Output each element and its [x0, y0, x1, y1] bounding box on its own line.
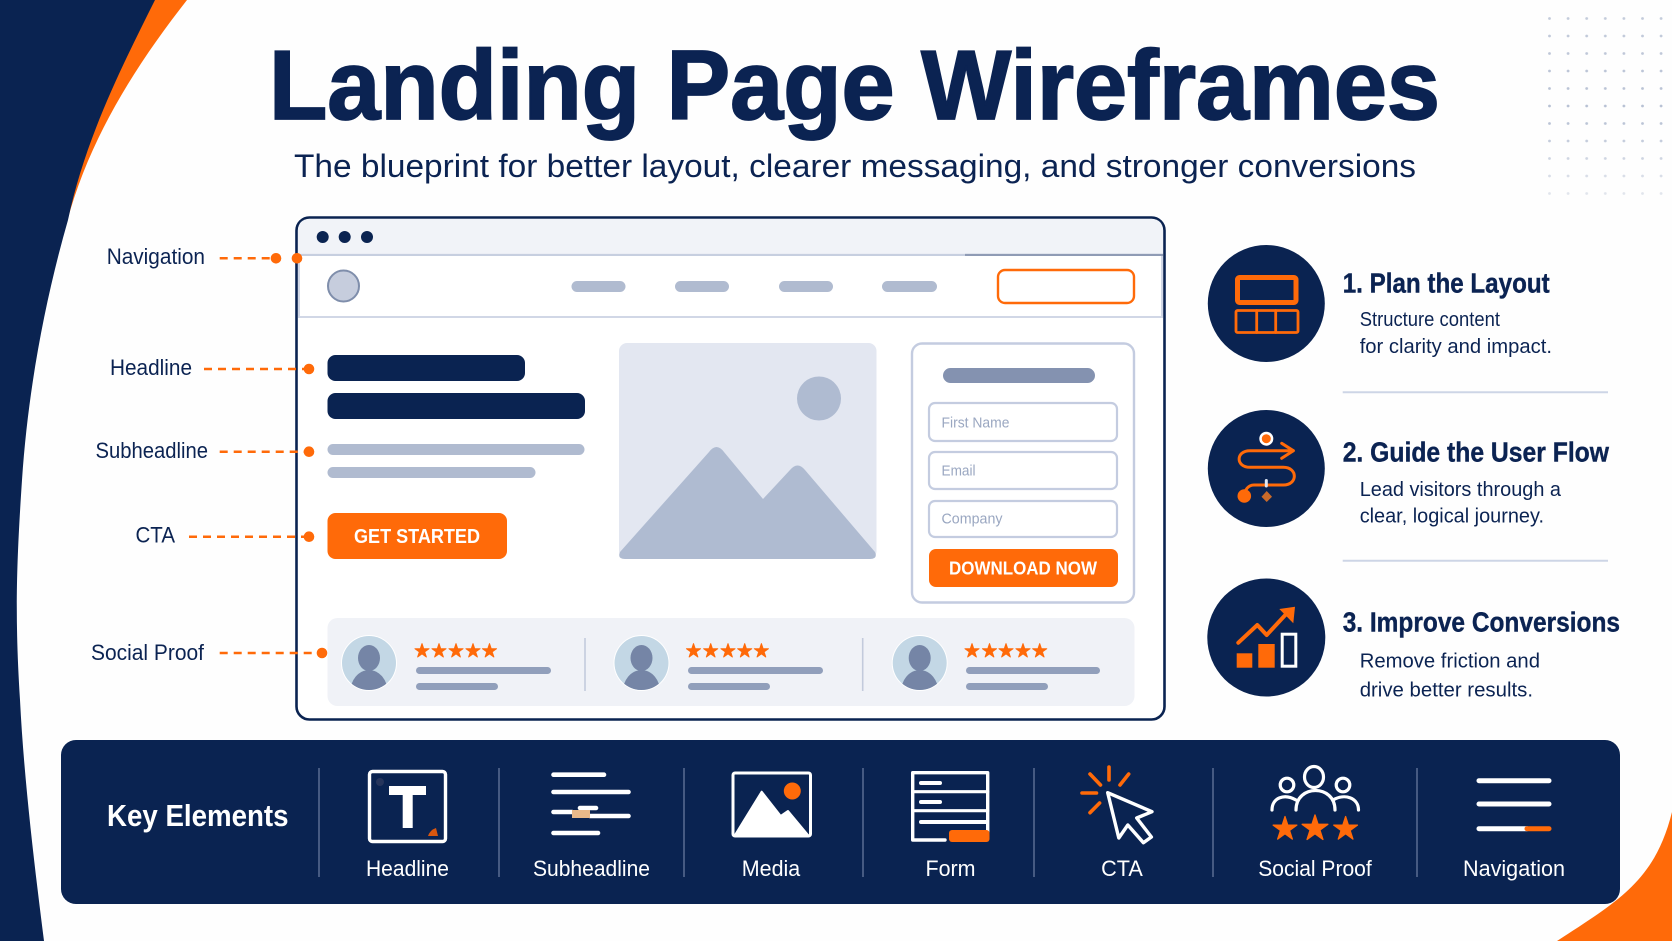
- navigation bar: [299, 256, 1162, 317]
- icon: user flow path: [1208, 410, 1325, 527]
- step 3 text: Remove friction and: [1360, 649, 1540, 672]
- callout: CTA: [136, 523, 314, 548]
- step 3 text: drive better results.: [1360, 679, 1533, 702]
- callout: Headline: Headline: [110, 355, 192, 380]
- item: form: [913, 773, 990, 881]
- step 1 text: for clarity and impact.: [1360, 335, 1552, 358]
- step 3 text: [1343, 607, 1620, 702]
- social proof band: [328, 618, 1134, 706]
- step 2: guide the user flow: [1208, 410, 1609, 527]
- testimonial 3: [892, 635, 1100, 691]
- callout: Subheadline: [96, 438, 314, 463]
- panel: browser wireframe: [296, 218, 1164, 720]
- media placeholder: [619, 343, 876, 559]
- item: headline: [366, 772, 449, 881]
- CTA button: GET STARTED: [354, 526, 480, 548]
- step 1 text: 1. Plan the Layout: [1343, 268, 1550, 299]
- CTA button: [328, 513, 507, 559]
- subtitle: The blueprint for better layout, clearer messaging, and stronger conversions: [294, 148, 1416, 184]
- item: social proof: Social Proof: [1258, 856, 1373, 881]
- item: navigation: Navigation: [1463, 856, 1565, 881]
- callout: Subheadline: Subheadline: [96, 438, 208, 463]
- item: subheadline: Subheadline: [533, 856, 650, 881]
- step 1 text: [1343, 268, 1552, 358]
- browser top bar: [298, 219, 1163, 255]
- item: headline: Headline: [366, 856, 449, 881]
- callout: Navigation: [107, 244, 302, 269]
- testimonial 2: [614, 635, 823, 691]
- icon: growth chart: [1207, 578, 1325, 696]
- key elements heading: Key Elements: [107, 798, 288, 833]
- step 3: improve conversions: [1207, 578, 1620, 702]
- callout: Social Proof: [91, 640, 327, 665]
- step 1 text: Structure content: [1360, 308, 1500, 331]
- item: CTA: [1082, 767, 1152, 881]
- headline bars: [328, 355, 585, 419]
- item: subheadline: [533, 775, 650, 881]
- step 2 text: 2. Guide the User Flow: [1343, 437, 1609, 468]
- form card: First Name: [942, 416, 1010, 432]
- panel: key elements: [61, 740, 1620, 904]
- step 2 text: [1343, 437, 1609, 527]
- item: form: Form: [926, 856, 976, 881]
- dot pattern, top right: [1548, 17, 1672, 195]
- callout: Navigation: Navigation: [107, 244, 205, 269]
- step 1: plan the layout: [1208, 245, 1552, 362]
- form card: Company: [942, 512, 1003, 528]
- icon: layout: [1208, 245, 1325, 362]
- form card: [912, 344, 1134, 602]
- item: media: [733, 773, 810, 881]
- callout: CTA: CTA: [136, 523, 175, 548]
- item: navigation: [1463, 781, 1565, 881]
- callout: Social Proof: Social Proof: [91, 640, 205, 665]
- navy sweep, left edge: [0, 0, 155, 941]
- item: social proof: [1258, 766, 1373, 881]
- item: CTA: CTA: [1101, 856, 1143, 881]
- form card: DOWNLOAD NOW: [949, 558, 1097, 578]
- orange sweep, top left: [60, 0, 187, 222]
- step 3 text: 3. Improve Conversions: [1343, 607, 1620, 638]
- subheadline bars: [328, 444, 584, 478]
- title: Landing Page Wireframes: [269, 30, 1440, 140]
- step 2 text: clear, logical journey.: [1360, 504, 1544, 527]
- item: media: Media: [742, 856, 801, 881]
- testimonial 1: [341, 635, 551, 691]
- form card: Email: [942, 464, 976, 480]
- orange corner accent, bottom right: [1557, 812, 1672, 941]
- callout: Headline: [110, 355, 314, 380]
- step 2 text: Lead visitors through a: [1360, 478, 1562, 501]
